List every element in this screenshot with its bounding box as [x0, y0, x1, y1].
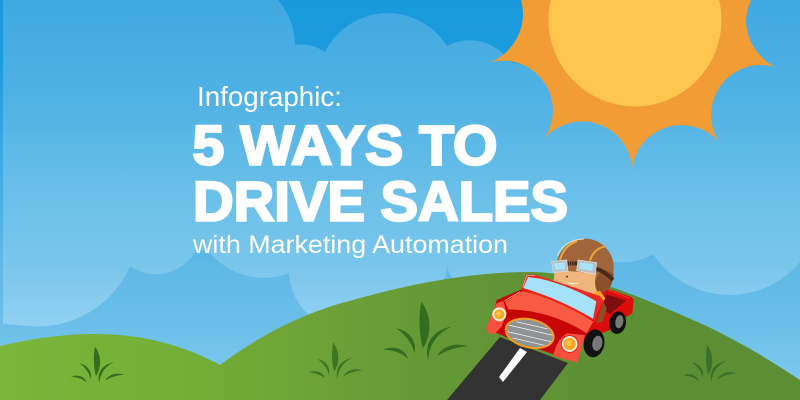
sun: [491, 0, 775, 168]
right hill: [170, 272, 800, 400]
title block: [192, 81, 568, 259]
intro label: Infographic:: [197, 81, 342, 112]
goggles: [552, 260, 568, 272]
left fender: [486, 301, 507, 334]
windshield: [521, 275, 603, 323]
strap: [596, 269, 613, 280]
car body: [490, 289, 594, 355]
headline line 2: DRIVE SALES: [193, 170, 568, 232]
smile: [566, 281, 579, 284]
left hill: [0, 334, 300, 400]
sun disc: [548, 0, 722, 106]
near rear wheel: [581, 328, 607, 359]
road dash: [499, 348, 527, 382]
torso: [596, 302, 607, 323]
grille: [503, 314, 557, 352]
rear body: [573, 287, 634, 340]
headline line 1: 5 WAYS TO: [192, 114, 498, 176]
driver: [552, 239, 614, 323]
hood: [505, 291, 593, 333]
grass tuft 2: [309, 342, 362, 379]
nose dot: [566, 276, 568, 278]
right headlight: [561, 336, 578, 352]
far rear wheel: [607, 310, 628, 335]
scarf: [588, 291, 605, 309]
grass tuft 1: [71, 347, 124, 383]
sun rays: [491, 0, 775, 168]
face: [553, 270, 599, 298]
road: [447, 337, 568, 400]
helmet: [556, 239, 614, 296]
left headlight: [492, 307, 506, 321]
subheading: with Marketing Automation: [192, 231, 508, 259]
helmet ear flap: [596, 269, 614, 293]
grass tuft 3: [383, 302, 467, 360]
car with driver: [486, 239, 634, 363]
right fender: [553, 333, 585, 363]
grass tuft 4: [683, 345, 736, 382]
helmet stripes: [560, 241, 577, 260]
